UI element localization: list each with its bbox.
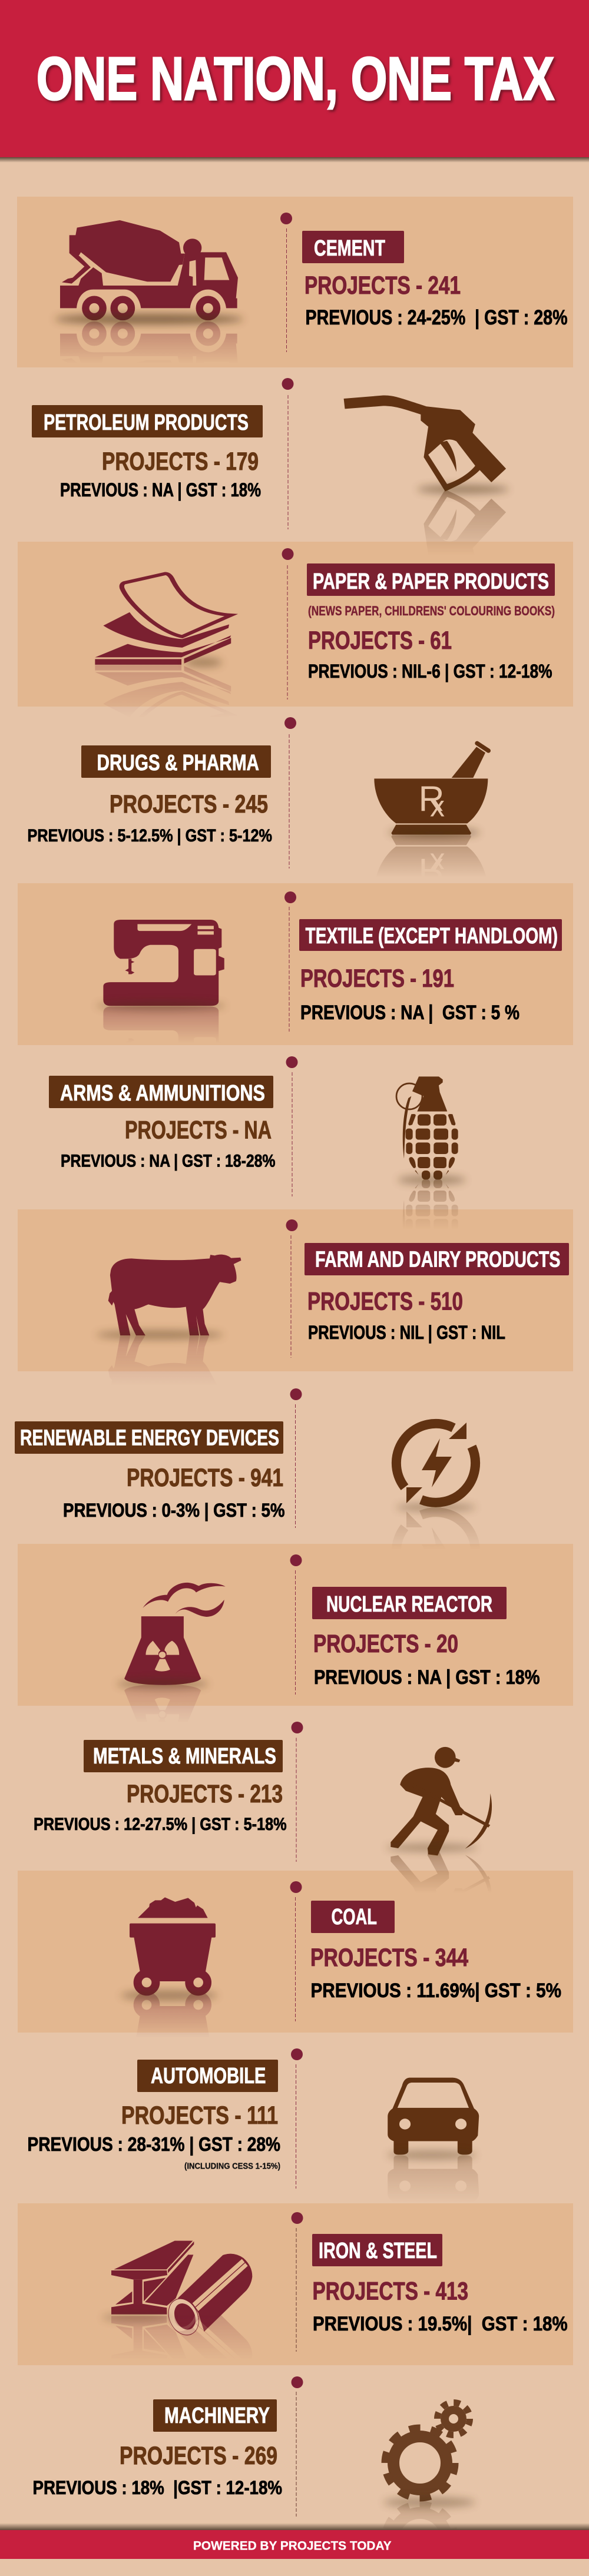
label: nuclear reactor bbox=[312, 1587, 507, 1619]
tax rates: PREVIOUS : 28-31% | GST : 28% bbox=[27, 2133, 280, 2155]
label: cement: CEMENT bbox=[314, 236, 385, 261]
timeline dashed line bbox=[292, 1072, 293, 1196]
timeline marker bbox=[286, 1219, 298, 1231]
section: iron and steel bbox=[102, 2212, 568, 2389]
projects count: PROJECTS - 191 bbox=[300, 964, 454, 993]
timeline marker bbox=[291, 2048, 303, 2060]
label: arms and ammunitions: ARMS & AMMUNITIONS bbox=[60, 1081, 265, 1106]
icon: miner with pickaxe bbox=[386, 1747, 492, 1957]
tax rates: PREVIOUS : NIL | GST : NIL bbox=[308, 1322, 505, 1343]
panel background: textile bbox=[18, 883, 573, 1045]
tax rates: PREVIOUS : NA | GST : 18% bbox=[60, 479, 261, 500]
label: cement bbox=[302, 231, 404, 263]
section: paper and paper products bbox=[95, 548, 555, 756]
section: cement bbox=[55, 213, 568, 422]
icon: renewable energy arrows bbox=[396, 1423, 476, 1592]
timeline dashed line bbox=[296, 2064, 297, 2189]
header banner bbox=[0, 0, 589, 163]
icon: hand grenade bbox=[396, 1076, 466, 1282]
section: farm and dairy products bbox=[96, 1219, 569, 1416]
section: nuclear reactor bbox=[117, 1554, 540, 1786]
label: coal bbox=[311, 1901, 395, 1933]
tax rates: PREVIOUS : 18% |GST : 12-18% bbox=[33, 2477, 282, 2498]
label: arms and ammunitions bbox=[49, 1076, 273, 1108]
section: coal bbox=[121, 1881, 561, 2090]
label: paper and paper products bbox=[307, 563, 555, 596]
projects count: PROJECTS - 213 bbox=[127, 1780, 283, 1808]
icon: fuel nozzle bbox=[344, 396, 509, 585]
timeline dashed line bbox=[296, 2228, 297, 2352]
icon: coal cart bbox=[121, 1897, 217, 2090]
label: drugs and pharma bbox=[81, 745, 271, 778]
label: petroleum products: PETROLEUM PRODUCTS bbox=[44, 410, 249, 435]
footer banner bbox=[0, 2523, 589, 2559]
label: iron and steel: IRON & STEEL bbox=[319, 2239, 437, 2263]
section: arms and ammunitions bbox=[49, 1056, 466, 1282]
icon: cement mixer truck bbox=[55, 220, 243, 422]
timeline marker bbox=[284, 717, 296, 729]
timeline dashed line bbox=[286, 228, 287, 352]
label: petroleum products bbox=[32, 405, 263, 437]
timeline dashed line bbox=[294, 1897, 296, 2021]
tax rates: PREVIOUS : NA | GST : 18-28% bbox=[61, 1152, 276, 1171]
timeline dashed line bbox=[296, 1738, 297, 1862]
icon: sewing machine bbox=[96, 920, 226, 1093]
tax rates: PREVIOUS : 5-12.5% | GST : 5-12% bbox=[27, 826, 272, 846]
panel background: cement bbox=[17, 197, 573, 367]
section: petroleum products bbox=[32, 378, 509, 585]
tax rates: PREVIOUS : 0-3% | GST : 5% bbox=[63, 1500, 285, 1521]
icon: mortar and pestle bbox=[374, 743, 488, 927]
label: drugs and pharma: DRUGS & PHARMA bbox=[97, 751, 259, 775]
label: machinery bbox=[153, 2399, 277, 2432]
label: metals and minerals: METALS & MINERALS bbox=[93, 1744, 276, 1769]
icon: mortar and pestle: R bbox=[419, 778, 444, 818]
timeline dashed line bbox=[287, 395, 289, 529]
timeline marker bbox=[290, 1554, 302, 1566]
tax rates: PREVIOUS : NA | GST : 5 % bbox=[300, 1002, 519, 1024]
projects count: PROJECTS - 20 bbox=[313, 1630, 458, 1658]
timeline marker bbox=[290, 1388, 302, 1400]
timeline dashed line bbox=[290, 1235, 292, 1358]
projects count: PROJECTS - NA bbox=[125, 1116, 272, 1145]
timeline marker bbox=[280, 213, 292, 224]
section: renewable energy devices bbox=[15, 1388, 476, 1592]
label: machinery: MACHINERY bbox=[164, 2403, 270, 2428]
projects count: PROJECTS - 111 bbox=[121, 2101, 278, 2130]
panel background: nuclear reactor bbox=[18, 1544, 573, 1706]
timeline dashed line bbox=[294, 1404, 296, 1528]
projects count: PROJECTS - 269 bbox=[120, 2442, 277, 2470]
tax rates: PREVIOUS : 12-27.5% | GST : 5-18% bbox=[34, 1815, 287, 1834]
timeline dashed line bbox=[294, 1570, 296, 1695]
label: renewable energy devices bbox=[15, 1421, 283, 1454]
tax rates: PREVIOUS : NA | GST : 18% bbox=[314, 1666, 540, 1689]
label: farm and dairy products bbox=[305, 1243, 569, 1275]
section: machinery bbox=[34, 2376, 476, 2526]
section: drugs and pharma bbox=[27, 717, 488, 927]
panel background: farm and dairy bbox=[18, 1209, 573, 1371]
note: including cess: (INCLUDING CESS 1-15%) bbox=[184, 2161, 280, 2171]
projects count: PROJECTS - 245 bbox=[110, 790, 268, 818]
projects count: PROJECTS - 179 bbox=[102, 447, 259, 476]
timeline dashed line bbox=[287, 565, 288, 699]
section: automobile bbox=[27, 2048, 479, 2232]
projects count: PROJECTS - 413 bbox=[312, 2277, 468, 2306]
label: automobile: AUTOMOBILE bbox=[151, 2064, 266, 2088]
timeline dashed line bbox=[296, 2392, 297, 2517]
timeline marker bbox=[291, 2212, 303, 2224]
projects count: PROJECTS - 241 bbox=[305, 271, 461, 300]
panel background: paper bbox=[18, 542, 573, 707]
panel background: iron and steel bbox=[18, 2203, 573, 2365]
label: metals and minerals bbox=[84, 1740, 283, 1772]
timeline dashed line bbox=[289, 734, 290, 868]
section: metals and minerals bbox=[34, 1722, 492, 1957]
projects count: PROJECTS - 61 bbox=[308, 626, 452, 655]
timeline marker bbox=[290, 1881, 302, 1893]
icon: car front bbox=[387, 2078, 479, 2232]
timeline marker bbox=[282, 548, 293, 560]
projects count: PROJECTS - 510 bbox=[307, 1287, 463, 1315]
label: iron and steel bbox=[312, 2234, 442, 2266]
label: coal: COAL bbox=[331, 1905, 377, 1929]
panel background: coal bbox=[18, 1871, 573, 2033]
projects count: PROJECTS - 344 bbox=[310, 1944, 468, 1972]
label: automobile bbox=[137, 2060, 278, 2092]
timeline dashed line bbox=[289, 907, 290, 1032]
timeline marker bbox=[286, 1056, 298, 1068]
section: textile bbox=[96, 891, 562, 1093]
label: renewable energy devices: RENEWABLE ENERGY DEVICES bbox=[20, 1426, 279, 1451]
footer credit: POWERED BY PROJECTS TODAY bbox=[193, 2539, 391, 2553]
icon: cow bbox=[96, 1255, 241, 1416]
icon: steel beam and pipe bbox=[102, 2241, 252, 2389]
timeline marker bbox=[284, 891, 296, 903]
icon: nuclear cooling tower bbox=[117, 1583, 226, 1786]
timeline marker bbox=[291, 1722, 303, 1733]
icon: gears bbox=[382, 2399, 476, 2526]
icon: paper stack bbox=[95, 573, 231, 756]
label: nuclear reactor: NUCLEAR REACTOR bbox=[326, 1592, 492, 1617]
icon: mortar and pestle: x bbox=[430, 790, 445, 823]
timeline marker bbox=[291, 2376, 303, 2388]
projects count: PROJECTS - 941 bbox=[127, 1464, 283, 1492]
timeline marker bbox=[282, 378, 293, 390]
